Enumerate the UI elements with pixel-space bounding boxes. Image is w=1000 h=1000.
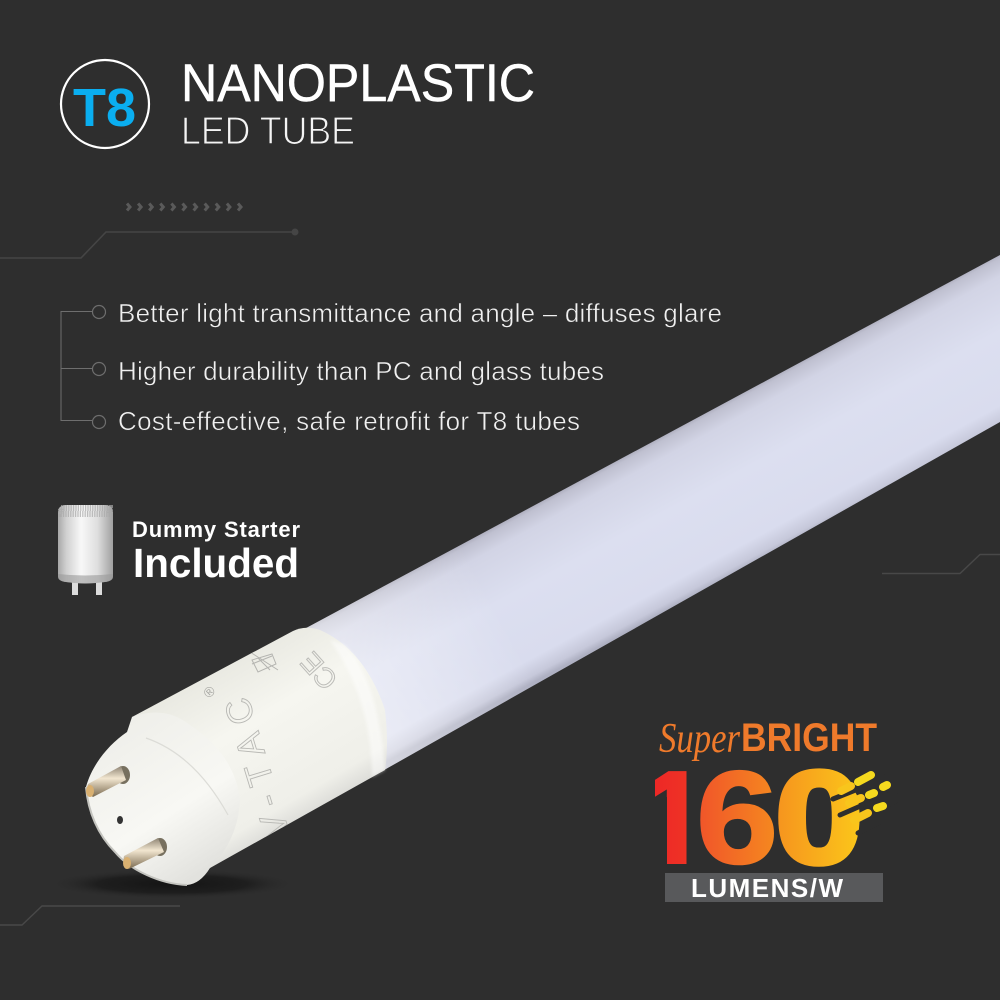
lumens/w bar	[665, 873, 883, 903]
embossed logo: V-TAC	[216, 693, 298, 844]
speed streaks	[833, 775, 892, 833]
dummy starter text	[132, 517, 300, 586]
number 160	[655, 768, 860, 867]
dummy starter text: Dummy Starter	[132, 517, 300, 542]
number 160: 1	[637, 744, 710, 891]
title: NANOPLASTIC	[181, 54, 535, 113]
title	[181, 54, 535, 153]
badge: T8	[61, 60, 149, 148]
circuit line: bottom left	[0, 906, 180, 925]
badge: T8: T8	[73, 78, 136, 138]
super bright heading: Super	[659, 716, 741, 762]
feature list: Cost-effective, safe retrofit for T8 tubes	[118, 406, 580, 436]
super bright heading: BRIGHT	[741, 716, 877, 760]
dummy starter text: Included	[133, 540, 299, 586]
icon: dummy starter	[58, 505, 113, 595]
LED tube	[86, 255, 1000, 885]
end cap	[86, 628, 387, 885]
badge: super bright 160 lumens	[655, 723, 891, 902]
embossed logo: ®	[200, 682, 219, 701]
number 160: 6	[696, 743, 778, 891]
embossed logo	[204, 650, 336, 838]
feature list	[61, 298, 722, 436]
pin: bottom	[123, 838, 167, 869]
pin hole	[117, 816, 123, 824]
feature list: Better light transmittance and angle – diffuses glare	[118, 298, 722, 328]
embossed logo: CE	[294, 646, 343, 696]
pin: top	[86, 766, 130, 797]
super bright heading	[659, 716, 877, 762]
lumens/w bar: LUMENS/W	[691, 873, 843, 903]
number 160: 0	[775, 743, 863, 891]
decoration: chevrons and circuit line	[0, 204, 298, 258]
cap front face	[86, 712, 240, 885]
feature list: Higher durability than PC and glass tubes	[118, 356, 604, 386]
tube shadow	[47, 869, 297, 899]
circuit line: right	[882, 554, 1000, 574]
title: LED TUBE	[181, 110, 355, 153]
tube body	[295, 255, 1000, 778]
